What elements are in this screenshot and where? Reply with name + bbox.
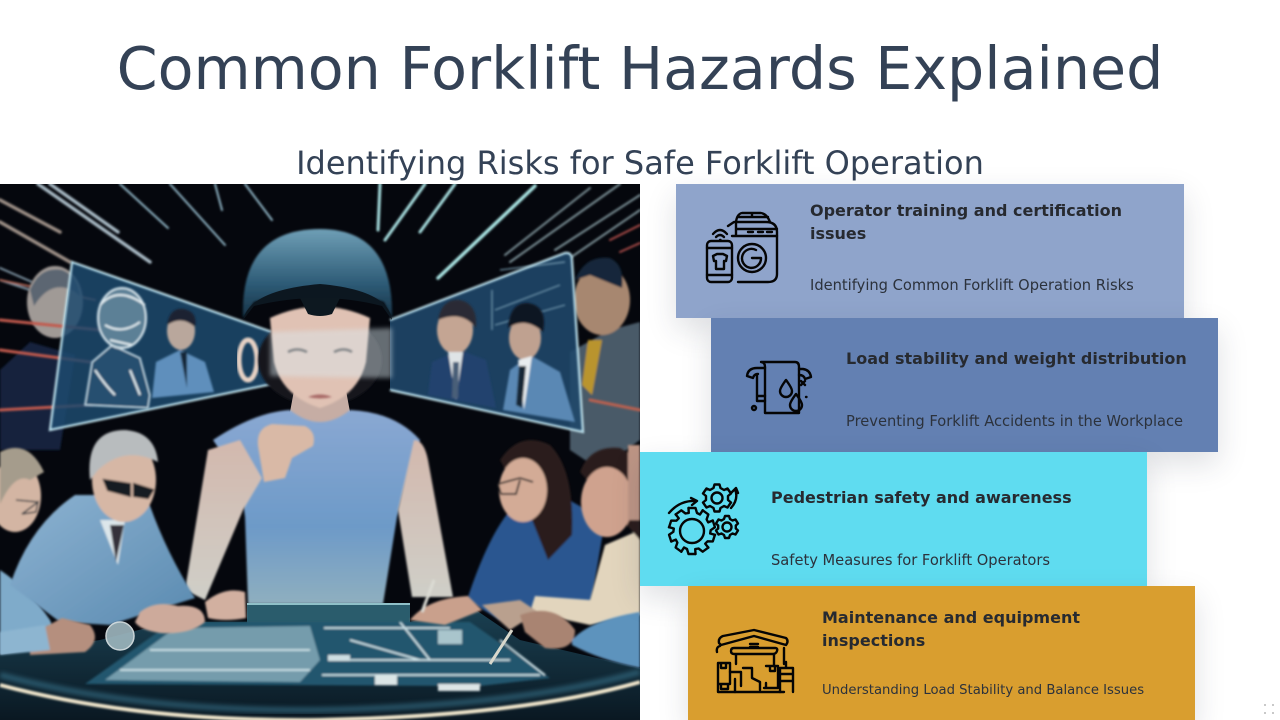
heading: Operator training and certification issues	[810, 201, 1122, 243]
hands on the table	[0, 580, 640, 668]
large gear	[667, 506, 717, 556]
icon: washer and phone	[706, 212, 778, 284]
background	[0, 184, 640, 720]
panel: maintenance	[688, 586, 1195, 720]
right background man	[570, 258, 640, 470]
description: Safety Measures for Forklift Operators	[771, 552, 1050, 569]
right arm	[398, 440, 453, 597]
icon: towel with drops	[746, 360, 812, 414]
left background man	[0, 266, 83, 450]
central figure	[185, 229, 453, 604]
face	[270, 306, 370, 408]
light streaks	[0, 184, 640, 300]
hologram figure: smiling man	[428, 300, 496, 408]
red streaks	[0, 320, 640, 410]
hologram figure: man in light suit	[503, 303, 575, 422]
illustration: futuristic safety briefing around a holographic table	[0, 184, 640, 720]
lower gear	[716, 516, 738, 538]
left hologram panel	[50, 262, 272, 430]
icon: gears with arrows	[668, 483, 740, 556]
description: Identifying Common Forklift Operation Risks	[810, 277, 1134, 294]
right woman with glasses	[467, 440, 605, 620]
left woman	[0, 448, 60, 655]
description: Preventing Forklift Accidents in the Workplace	[846, 413, 1183, 430]
raised fist	[258, 424, 314, 482]
raised arm	[185, 440, 262, 600]
hologram figure: man in blue suit	[152, 309, 214, 398]
table	[0, 580, 640, 720]
table surface	[0, 603, 640, 720]
eyes and mouth	[288, 350, 352, 398]
dark hair	[258, 314, 382, 406]
heading: Pedestrian safety and awareness	[771, 488, 1072, 507]
resize grip	[1264, 704, 1274, 714]
dress	[213, 410, 420, 604]
upper gear	[703, 484, 731, 512]
magnifier	[106, 622, 134, 650]
heading: Maintenance and equipment inspections	[822, 608, 1080, 650]
man with glasses	[10, 430, 195, 625]
panel: pedestrian safety	[640, 452, 1147, 586]
right woman in cream blouse	[530, 445, 640, 625]
visor beam	[270, 328, 392, 378]
hologram figure: sketched man	[85, 288, 150, 408]
arrows around the gears	[669, 488, 738, 513]
right hologram panel	[390, 253, 583, 432]
neck	[274, 385, 366, 424]
description: Understanding Load Stability and Balance Issues	[822, 683, 1144, 698]
heading: Load stability and weight distribution	[846, 349, 1187, 368]
glowing table rim	[0, 682, 640, 720]
helmet	[243, 229, 392, 318]
icon: warehouse with boxes	[716, 628, 794, 694]
stylus	[490, 630, 512, 664]
subtitle: Identifying Risks for Safe Forklift Operation	[296, 144, 984, 182]
title: Common Forklift Hazards Explained	[117, 35, 1163, 103]
panel: load stability	[711, 318, 1218, 452]
panel: operator training	[676, 184, 1184, 318]
blueprint map	[85, 622, 550, 691]
